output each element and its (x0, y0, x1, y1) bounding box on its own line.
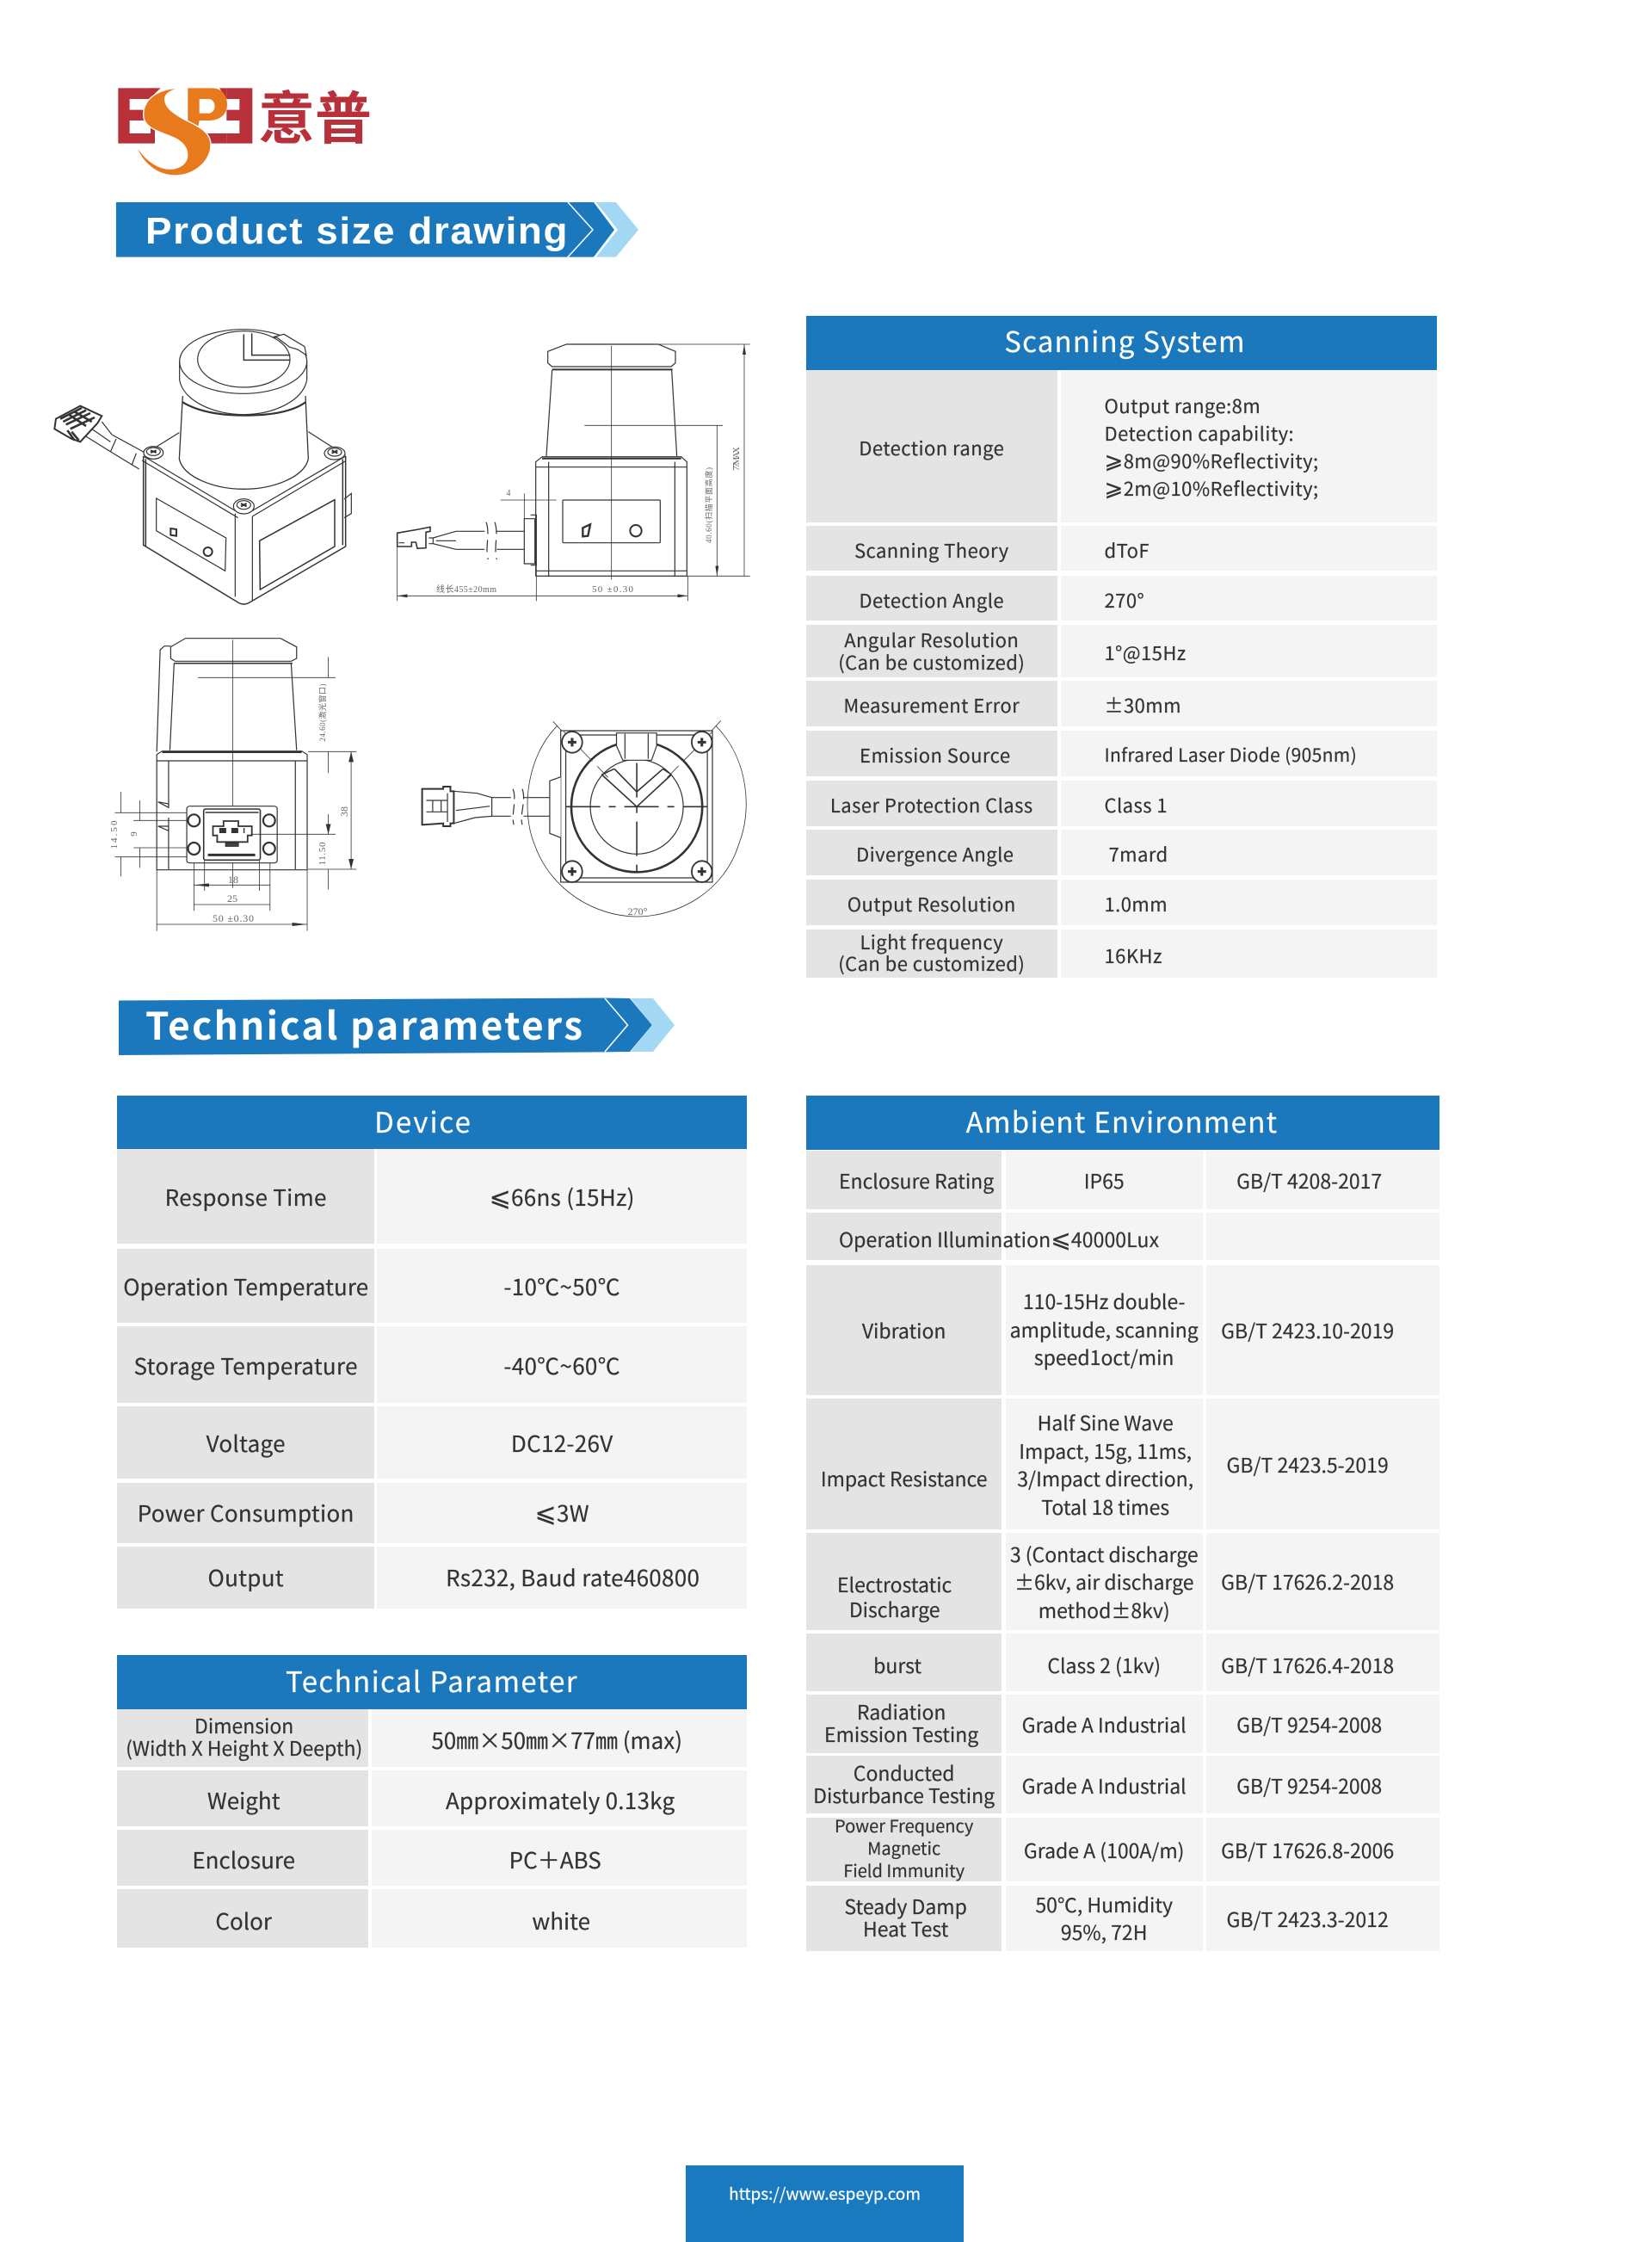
drawing: side view with dimensions: 50 ±0.30 (592, 584, 633, 595)
row: Emission Source: Emission Source (860, 741, 1010, 769)
row: Radiation Emission Testing: Radiation (857, 1695, 946, 1725)
heading: Device (117, 1096, 747, 1149)
row: Operation Temperature: -10℃~50℃ (503, 1270, 620, 1302)
row: Vibration: GB/T 2423.10-2019 (1221, 1315, 1394, 1344)
row: Vibration: amplitude, scanning (1010, 1314, 1199, 1343)
row: burst (806, 1634, 1439, 1691)
drawing: connector-side front view with dimensions: 38 (338, 806, 350, 817)
row: Vibration (806, 1265, 1439, 1395)
panel: Ambient Environment (806, 1096, 1439, 1951)
row: Dimension: Dimension (194, 1710, 293, 1739)
row: Enclosure (117, 1830, 747, 1886)
drawing: isometric product view (54, 330, 351, 604)
row: Detection Angle: 270° (1105, 586, 1144, 614)
row: Conducted Disturbance Testing: Grade A Industrial (1022, 1770, 1187, 1800)
row: Power Consumption: Power Consumption (138, 1497, 354, 1529)
row: Power Frequency Magnetic Field Immunity: Magnetic (867, 1835, 940, 1859)
heading: Technical Parameter (117, 1655, 747, 1709)
heading: Ambient Environment: Ambient Environment (966, 1100, 1278, 1141)
row: Light frequency: Light frequency (860, 928, 1003, 955)
row: Response Time: Response Time (165, 1181, 327, 1213)
row: Radiation Emission Testing: GB/T 9254-2008 (1236, 1709, 1382, 1739)
row: Measurement Error: ±30mm (1105, 691, 1181, 719)
row: Dimension (117, 1709, 747, 1767)
row: Angular Resolution (806, 625, 1437, 677)
row: Laser Protection Class: Class 1 (1105, 791, 1168, 818)
row: Storage Temperature (117, 1326, 747, 1403)
row: Divergence Angle (806, 830, 1437, 875)
row: burst: GB/T 17626.4-2018 (1221, 1650, 1394, 1679)
drawing: connector-side front view with dimensions: 50 ±0.30 (213, 912, 254, 924)
row: Voltage: DC12-26V (511, 1427, 613, 1459)
row: Steady Damp Heat Test: 95%, 72H (1061, 1917, 1147, 1946)
row: Output: Output (208, 1561, 284, 1593)
row: Power Frequency Magnetic Field Immunity: GB/T 17626.8-2006 (1221, 1835, 1394, 1864)
row: Emission Source (806, 731, 1437, 776)
row: Detection range (806, 370, 1437, 522)
row: Power Frequency Magnetic Field Immunity (806, 1813, 1439, 1881)
row: Scanning Theory: dToF (1105, 536, 1150, 564)
drawing: side view with dimensions: 线长455±20mm (436, 584, 496, 595)
row: Enclosure Rating: GB/T 4208-2017 (1236, 1165, 1382, 1195)
row: Electrostatic Discharge: method±8kv) (1039, 1594, 1170, 1623)
row: Vibration: Vibration (862, 1315, 946, 1344)
row: Light frequency: (Can be customized) (838, 949, 1025, 977)
row: Divergence Angle: Divergence Angle (856, 840, 1014, 868)
heading: Device: Device (374, 1100, 472, 1141)
row: Impact Resistance: Impact, 15g, 11ms, (1019, 1436, 1192, 1465)
banner: Technical parameters: Technical parameters (145, 996, 583, 1051)
row: Impact Resistance: 3/Impact direction, (1017, 1463, 1193, 1492)
row: Detection range: Detection range (859, 434, 1004, 461)
drawing: side view with dimensions (398, 344, 750, 601)
row: Electrostatic Discharge: GB/T 17626.2-2018 (1221, 1566, 1394, 1596)
row: Enclosure Rating: Enclosure Rating (839, 1165, 994, 1195)
row: Detection Angle: Detection Angle (859, 586, 1004, 614)
row: Light frequency: 16KHz (1105, 942, 1162, 969)
row: Enclosure: PC＋ABS (509, 1844, 601, 1875)
drawing: connector-side front view with dimensions (109, 639, 356, 931)
banner: Product size drawing: Product size drawing (145, 210, 569, 252)
row: Scanning Theory: Scanning Theory (854, 536, 1009, 564)
row: Conducted Disturbance Testing (806, 1756, 1439, 1813)
logo: ESPE: 意普 (258, 73, 372, 156)
row: Storage Temperature: -40℃~60℃ (503, 1350, 620, 1380)
drawing: side view with dimensions: 77MAX (731, 447, 742, 471)
row: burst: Class 2 (1kv) (1047, 1650, 1161, 1679)
row: Operation Illumination: Operation Illumination⩽40000Lux (839, 1220, 1159, 1255)
row: Scanning Theory (806, 526, 1437, 571)
drawing: side view with dimensions: 40.60(扫描平面高度) (704, 467, 713, 543)
drawing: side view with dimensions: 4 (506, 489, 511, 498)
footer: website (686, 2165, 964, 2242)
drawing: connector-side front view with dimensions: 11.50 (317, 842, 328, 866)
drawing: connector-side front view with dimensions: 24.60(激光窗口) (317, 683, 327, 742)
row: Weight (117, 1770, 747, 1826)
row: Detection range: Detection capability: (1105, 418, 1294, 446)
drawing: connector-side front view with dimensions: 18 (228, 874, 238, 886)
row: Color: Color (215, 1904, 272, 1936)
row: Conducted Disturbance Testing: GB/T 9254-2008 (1236, 1770, 1382, 1800)
row: Power Frequency Magnetic Field Immunity: Grade A (100A/m) (1024, 1835, 1184, 1864)
row: Dimension: 50㎜×50㎜×77㎜ (max) (431, 1724, 682, 1756)
heading: Scanning System: Scanning System (1004, 319, 1246, 361)
logo: ESPE (118, 73, 372, 176)
row: Steady Damp Heat Test: GB/T 2423.3-2012 (1227, 1904, 1389, 1933)
row: Electrostatic Discharge: Electrostatic (837, 1569, 952, 1598)
row: Response Time (117, 1149, 747, 1244)
row: Measurement Error: Measurement Error (843, 691, 1020, 719)
row: Power Frequency Magnetic Field Immunity: Power Frequency (835, 1813, 973, 1837)
row: Electrostatic Discharge: 3 (Contact discharge (1010, 1539, 1199, 1568)
drawing: connector-side front view with dimensions: 9 (129, 831, 139, 837)
row: Impact Resistance: GB/T 2423.5-2019 (1227, 1449, 1389, 1479)
row: Emission Source: Infrared Laser Diode (905nm) (1105, 742, 1357, 768)
row: Weight: Approximately 0.13kg (446, 1784, 675, 1816)
drawing: connector-side front view with dimensions: 25 (227, 892, 237, 905)
row: Enclosure: Enclosure (192, 1844, 295, 1875)
row: Response Time: ⩽66ns (15Hz) (490, 1176, 635, 1214)
row: burst: burst (873, 1650, 922, 1679)
row: Voltage (117, 1406, 747, 1479)
row: Divergence Angle: 7mard (1108, 840, 1168, 868)
row: Output Resolution: 1.0mm (1105, 890, 1168, 917)
row: Output Resolution (806, 880, 1437, 925)
row: Output Resolution: Output Resolution (848, 890, 1016, 917)
banner: Product size drawing (116, 202, 638, 257)
row: Angular Resolution: (Can be customized) (838, 647, 1025, 675)
row: Radiation Emission Testing (806, 1695, 1439, 1753)
row: Enclosure Rating (806, 1151, 1439, 1209)
row: Weight: Weight (207, 1784, 280, 1816)
row: Electrostatic Discharge (806, 1533, 1439, 1630)
row: Detection range: ⩾8m@90%Reflectivity; (1105, 442, 1319, 475)
row: Impact Resistance: Impact Resistance (821, 1463, 987, 1492)
row: Impact Resistance (806, 1399, 1439, 1529)
row: Angular Resolution: 1°@15Hz (1105, 639, 1187, 666)
row: Storage Temperature: Storage Temperature (134, 1350, 358, 1380)
heading: Scanning System (806, 316, 1437, 370)
row: Conducted Disturbance Testing: Conducted (854, 1757, 954, 1787)
row: Radiation Emission Testing: Emission Testing (824, 1718, 978, 1747)
row: Detection Angle (806, 576, 1437, 621)
heading: Ambient Environment (806, 1096, 1439, 1150)
row: Impact Resistance: Total 18 times (1041, 1491, 1169, 1520)
panel: Technical Parameter (117, 1655, 747, 1948)
row: Steady Damp Heat Test: Heat Test (863, 1913, 948, 1942)
row: Vibration: speed1oct/min (1034, 1342, 1174, 1371)
panel: Scanning System (806, 316, 1437, 978)
row: Steady Damp Heat Test (806, 1886, 1439, 1951)
row: Color (117, 1889, 747, 1948)
row: Operation Illumination (806, 1213, 1439, 1260)
row: Detection range: Output range:8m (1105, 391, 1261, 418)
row: Electrostatic Discharge: ±6kv, air discharge (1014, 1566, 1193, 1596)
row: Output (117, 1547, 747, 1609)
drawing: top view with 270 degree scan arc: 270° (628, 905, 648, 917)
panel: Device (117, 1096, 747, 1609)
row: Operation Temperature: Operation Temperature (123, 1270, 368, 1302)
row: Measurement Error (806, 681, 1437, 726)
row: Light frequency (806, 928, 1437, 978)
footer: website: https://www.espeyp.com (729, 2182, 921, 2205)
row: Radiation Emission Testing: Grade A Industrial (1022, 1709, 1187, 1739)
row: Electrostatic Discharge: Discharge (849, 1594, 940, 1623)
drawing: top view with 270 degree scan arc (422, 720, 746, 917)
row: Conducted Disturbance Testing: Disturbance Testing (813, 1780, 995, 1809)
row: Operation Temperature (117, 1249, 747, 1323)
heading: Technical Parameter: Technical Parameter (286, 1659, 578, 1701)
row: Steady Damp Heat Test: Steady Damp (844, 1891, 967, 1920)
row: Vibration: 110-15Hz double- (1023, 1286, 1185, 1315)
row: Power Consumption: ⩽3W (535, 1492, 589, 1529)
row: Output: Rs232, Baud rate460800 (446, 1561, 700, 1593)
row: Voltage: Voltage (206, 1427, 286, 1459)
row: Power Consumption (117, 1483, 747, 1543)
row: Laser Protection Class: Laser Protection Class (830, 791, 1033, 818)
row: Power Frequency Magnetic Field Immunity: Field Immunity (843, 1857, 965, 1881)
row: Enclosure Rating: IP65 (1084, 1165, 1125, 1195)
row: Laser Protection Class (806, 781, 1437, 826)
row: Angular Resolution: Angular Resolution (844, 626, 1019, 653)
row: Steady Damp Heat Test: 50℃, Humidity (1035, 1888, 1173, 1918)
row: Color: white (532, 1904, 590, 1936)
drawing: connector-side front view with dimensions: 14.50 (109, 820, 120, 849)
row: Detection range: ⩾2m@10%Reflectivity; (1105, 470, 1319, 503)
row: Impact Resistance: Half Sine Wave (1038, 1407, 1174, 1436)
row: Dimension: (Width X Height X Deepth) (126, 1732, 362, 1762)
